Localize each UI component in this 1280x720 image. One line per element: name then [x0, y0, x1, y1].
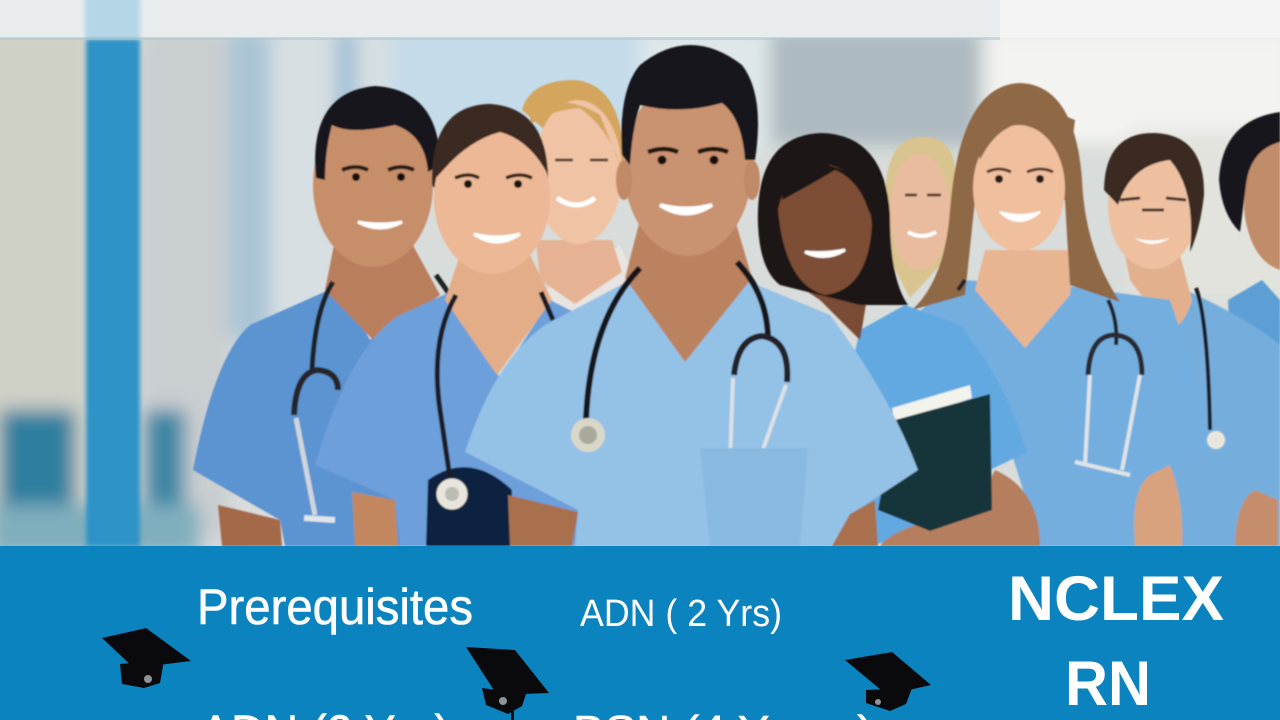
person: man in left foreground [193, 86, 470, 546]
label: RN: RN [1065, 649, 1151, 719]
label: NCLEX: NCLEX [1008, 564, 1224, 634]
person: blonde woman in back left [522, 80, 640, 320]
person: right woman with stethoscope [1104, 133, 1280, 546]
person: blonde woman in back right [885, 137, 956, 298]
icon: graduation cap 3 [845, 652, 931, 711]
label: Prerequisites: Prerequisites [197, 579, 473, 635]
icon: graduation cap 1 [102, 628, 191, 688]
label: ADN 2 years: ADN ( 2 Yrs) [580, 593, 782, 635]
person: central male student [465, 45, 918, 546]
icon: graduation cap 2 [466, 647, 549, 720]
bottom blue band [0, 546, 1280, 720]
photo: group of nursing students [193, 45, 1280, 546]
person: far right man [1218, 111, 1280, 346]
hospital corridor background photo [0, 0, 1280, 555]
person: woman with dark hair holding clipboard [758, 133, 1040, 546]
person: woman with long brown hair [912, 83, 1208, 546]
person: woman in left foreground [315, 104, 590, 546]
